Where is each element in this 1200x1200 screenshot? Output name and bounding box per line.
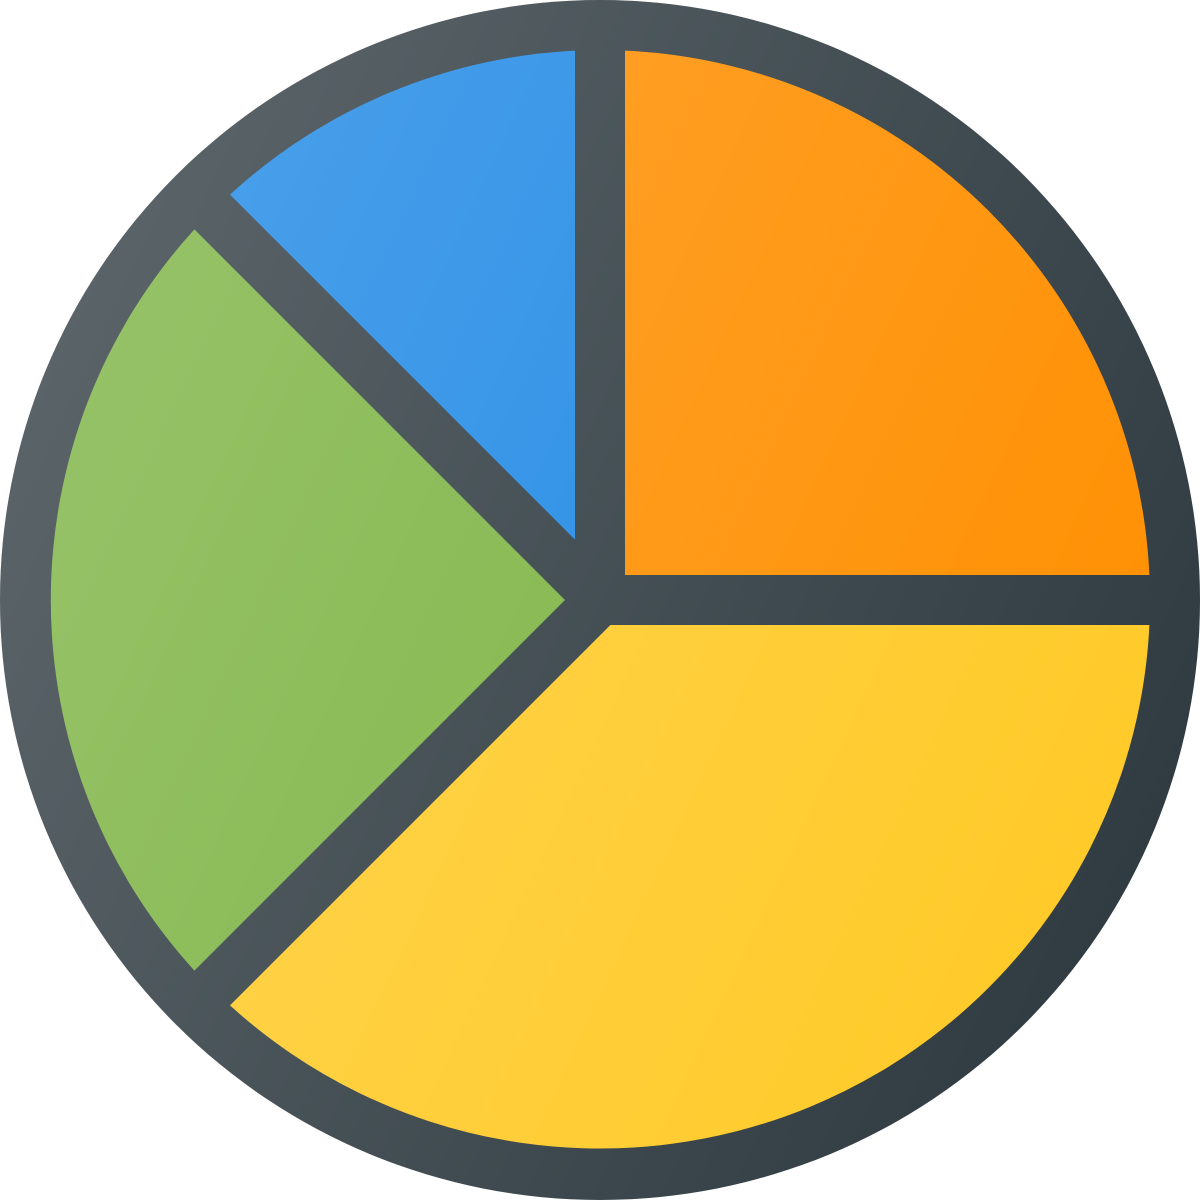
slice: blue <box>230 51 575 540</box>
slice: yellow <box>230 625 1149 1148</box>
slice: green <box>51 229 565 971</box>
slice: orange quarter <box>625 51 1149 575</box>
